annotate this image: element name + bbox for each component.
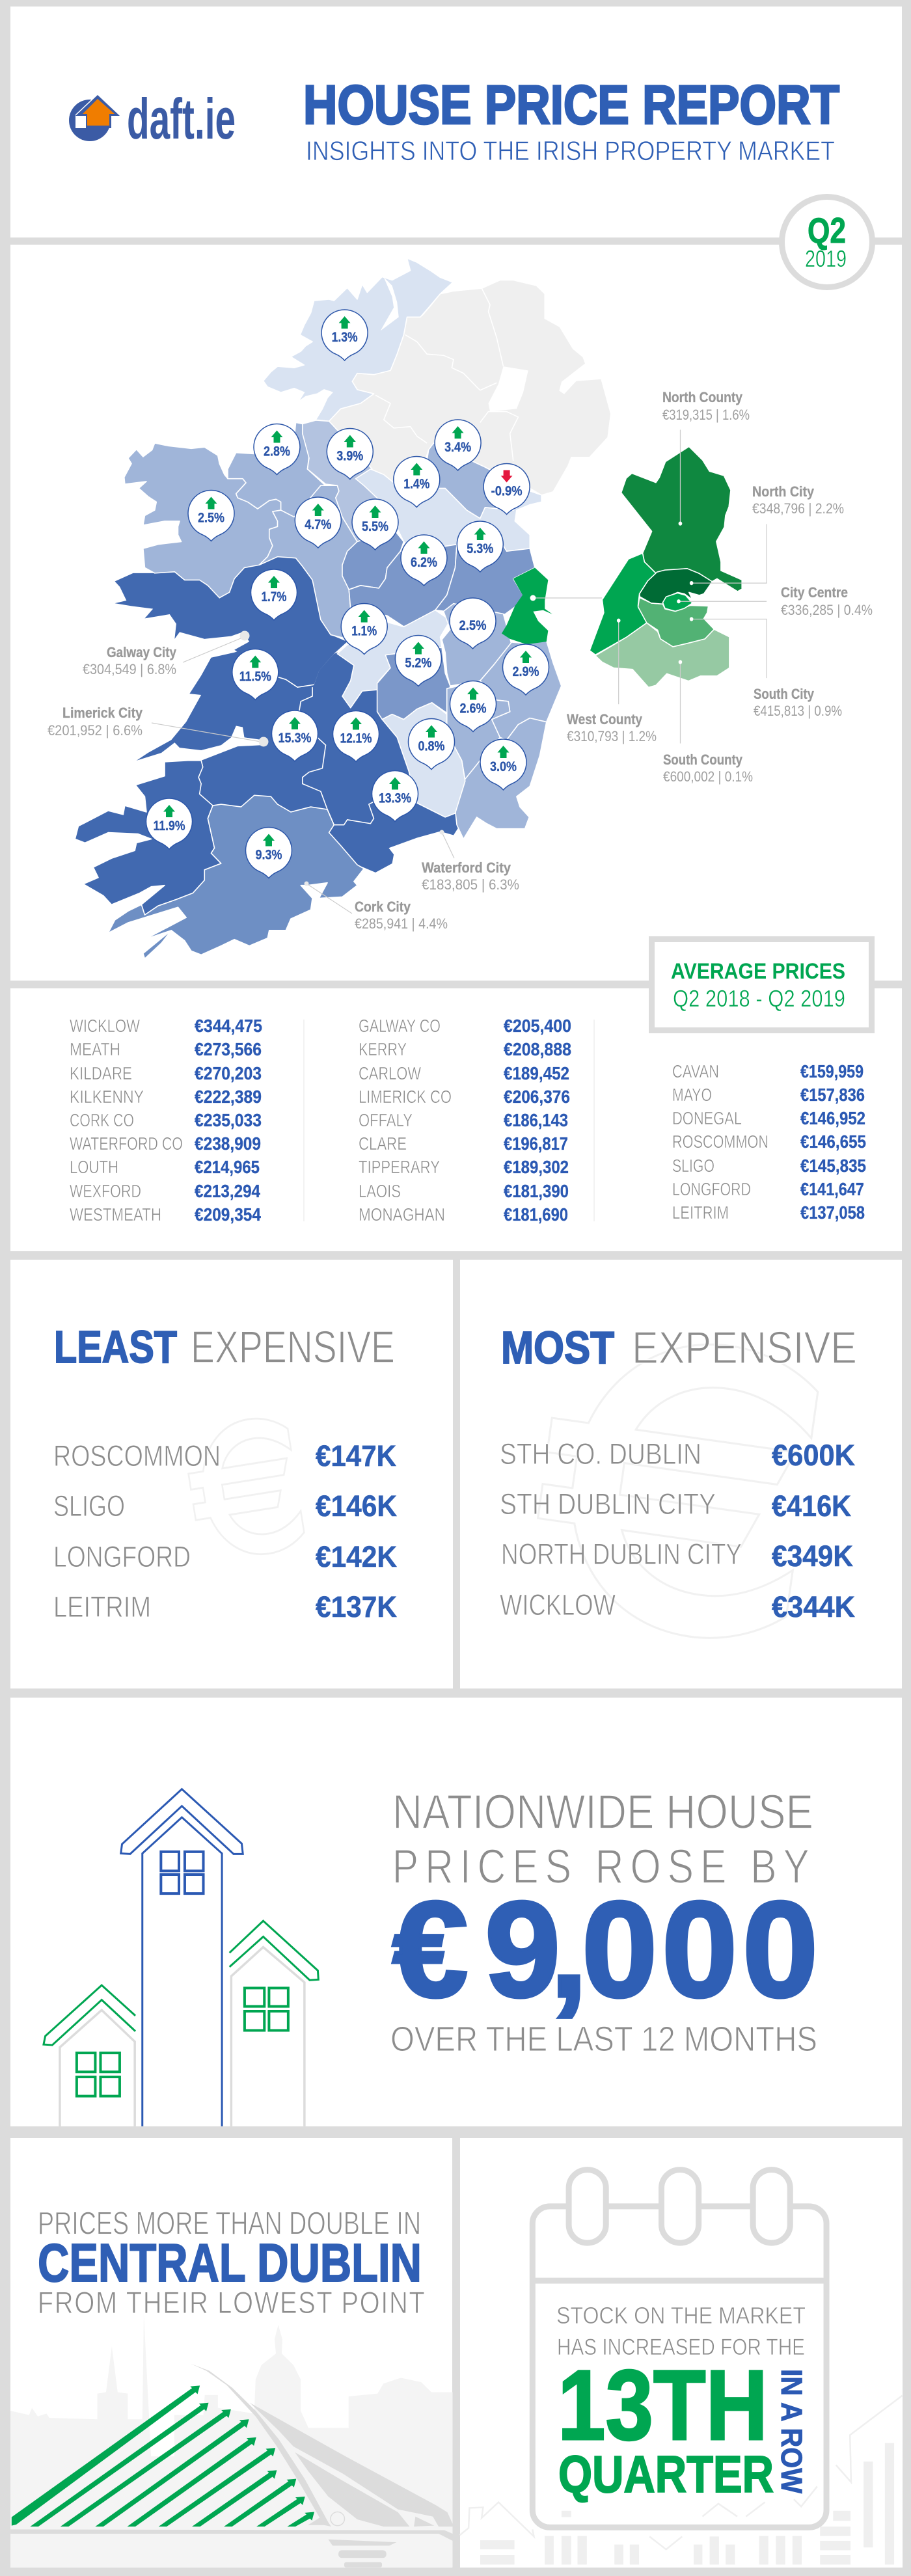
label: Limerick City [48, 705, 268, 747]
label: West County [567, 711, 657, 744]
badge: Q2 2019: 2019 [805, 245, 847, 272]
Cork [108, 795, 364, 958]
pin: 3.9% [327, 428, 373, 479]
pin: -0.9% [483, 463, 530, 514]
label: Galway City: €304,549 | 6.8% [83, 661, 176, 677]
headline: nationwide: NATIONWIDE HOUSE [392, 1785, 813, 1839]
column 1 prices: KILDARE [70, 1063, 132, 1083]
rising arrows [12, 2385, 314, 2527]
list: most expensive: STH DUBLIN CITY [500, 1487, 716, 1521]
column 2 prices: €208,888 [504, 1039, 571, 1059]
column 1 prices: €213,294 [195, 1181, 261, 1201]
column 2 prices: €181,390 [504, 1181, 569, 1201]
pin: 5.2%: 5.2% [405, 656, 432, 670]
badge: Q2 2019 [782, 197, 872, 288]
pin: -0.9%: -0.9% [491, 484, 523, 498]
list: least expensive: €142K [316, 1540, 397, 1573]
column 1 prices [70, 1016, 262, 1225]
Clare, Limerick, Tipperary and Waterford [137, 647, 459, 873]
pin: 2.5% Kildare [450, 598, 496, 649]
pin: 3.4%: 3.4% [444, 440, 471, 455]
column 1 prices: WESTMEATH [70, 1204, 161, 1225]
pin: 2.5% Mayo [188, 490, 234, 541]
list: most expensive: €349K [772, 1539, 853, 1573]
icon: houses [44, 1789, 318, 2126]
Galway [115, 557, 347, 687]
South County [595, 623, 729, 687]
headline: central dublin: CENTRAL DUBLIN [38, 2232, 422, 2293]
column 2 prices: LAOIS [359, 1181, 401, 1201]
Lough Swilly [381, 277, 399, 331]
label: West County: West County [567, 711, 643, 727]
label: Waterford City: Waterford City [422, 860, 511, 876]
logo: daft.ie [69, 87, 236, 151]
pin: 6.2%: 6.2% [411, 555, 437, 570]
headline: stock on the market: HAS INCREASED FOR THE [557, 2335, 805, 2360]
icon: euro watermark [524, 1323, 823, 1649]
label: South City: €415,813 | 0.9% [754, 703, 842, 719]
connector: Dublin to breakout [530, 595, 602, 601]
badge: average prices [652, 940, 872, 1031]
illustration: faint houses and bars [460, 2396, 903, 2564]
skyline [10, 2314, 452, 2568]
headline: stock on the market: QUARTER [558, 2445, 774, 2503]
label: South City: South City [754, 686, 815, 702]
headline: stock on the market: STOCK ON THE MARKET [556, 2302, 806, 2329]
pin: 1.1%: 1.1% [351, 623, 377, 639]
headline: nationwide: OVER THE LAST 12 MONTHS [390, 2020, 817, 2059]
label: City Centre: €336,285 | 0.4% [781, 602, 873, 618]
Dublin breakout map [530, 389, 873, 785]
label: Waterford City: €183,805 | 6.3% [422, 876, 519, 893]
label: Cork City: €285,941 | 4.4% [355, 915, 448, 932]
heading: least expensive [54, 1322, 395, 1372]
pin: 0.8% [409, 718, 454, 769]
pin: 0.8%: 0.8% [418, 739, 445, 753]
list: least expensive: ROSCOMMON [53, 1439, 221, 1472]
pin: 11.9% [146, 798, 193, 849]
column 2 prices: KERRY [359, 1039, 407, 1059]
label: Limerick City: Limerick City [62, 705, 143, 721]
left house [44, 1985, 135, 2126]
pin: 1.4%: 1.4% [403, 476, 430, 492]
South City [638, 597, 714, 647]
column 1 prices: WATERFORD CO [70, 1133, 183, 1154]
Offaly [349, 545, 457, 627]
column 2 prices: GALWAY CO [359, 1016, 441, 1036]
column 1 prices: LOUTH [70, 1157, 118, 1177]
pin: 1.4% [394, 456, 440, 508]
Meath [435, 545, 535, 614]
pin: 1.1% [341, 603, 387, 655]
icon: calendar [532, 2170, 826, 2527]
centre house [121, 1789, 243, 2126]
Northern Ireland borders and Lough Neagh [375, 288, 528, 461]
bridge [10, 2364, 452, 2568]
label: North City: €348,796 | 2.2% [752, 500, 844, 517]
column 1 prices: CORK CO [70, 1110, 134, 1130]
column 2 prices: CARLOW [359, 1063, 421, 1083]
headline: central dublin: FROM THEIR LOWEST POINT [38, 2286, 425, 2320]
column 3 prices: €141,647 [800, 1179, 864, 1199]
list: most expensive [500, 1437, 855, 1623]
West County [590, 553, 657, 655]
Northern Ireland [329, 280, 611, 495]
list: most expensive: €344K [772, 1590, 855, 1623]
headline: nationwide: PRICES ROSE BY [392, 1840, 809, 1893]
column 2 prices [359, 1016, 571, 1225]
icon: euro watermark [182, 1413, 306, 1564]
label: City Centre: City Centre [781, 584, 848, 601]
pin: 3.4% [435, 420, 481, 470]
Kilkenny east [447, 681, 510, 780]
label: North City: North City [752, 483, 815, 500]
pin: 11.5% [232, 649, 279, 700]
pin: 15.3%: 15.3% [279, 731, 312, 746]
Kilkenny [382, 703, 465, 817]
column 1 prices: €344,475 [195, 1016, 262, 1036]
badge: average prices: Q2 2018 - Q2 2019 [673, 985, 845, 1012]
column 1 prices: WICKLOW [70, 1016, 140, 1036]
North County [621, 446, 742, 591]
heading: least expensive: EXPENSIVE [191, 1322, 395, 1372]
pin: 4.7%: 4.7% [305, 517, 332, 532]
list: least expensive: €146K [316, 1489, 397, 1523]
list: most expensive: €600K [772, 1439, 855, 1472]
column 3 prices: LONGFORD [672, 1179, 751, 1199]
label: Limerick City: €201,952 | 6.6% [48, 722, 143, 739]
label: South County: South County [663, 752, 743, 768]
Longford and Louth band [355, 469, 541, 551]
label: South County: €600,002 | 0.1% [663, 768, 753, 785]
label: South City [754, 686, 842, 719]
pin: 5.2% [395, 635, 441, 686]
column 2 prices: €189,452 [504, 1063, 569, 1083]
panel: map [10, 245, 902, 981]
pin: 2.8%: 2.8% [264, 444, 290, 459]
panel: most expensive [460, 1260, 902, 1688]
list: least expensive: €147K [316, 1439, 396, 1472]
pin: 2.9%: 2.9% [513, 664, 539, 679]
column 2 prices: €186,143 [504, 1110, 568, 1130]
column 1 prices: €209,354 [195, 1204, 262, 1225]
headline: stock on the market [556, 2302, 808, 2503]
pin: 2.6%: 2.6% [459, 701, 487, 716]
list: least expensive: LEITRIM [53, 1590, 151, 1623]
illustration: Dublin skyline and bridge [10, 2314, 452, 2568]
pin: 11.5%: 11.5% [239, 669, 271, 685]
pin: 11.9%: 11.9% [154, 819, 185, 834]
pin: 5.3%: 5.3% [467, 541, 494, 556]
column 1 prices: MEATH [70, 1039, 120, 1059]
list: least expensive: LONGFORD [53, 1540, 191, 1573]
skyline gap [152, 2425, 174, 2455]
list: least expensive: SLIGO [53, 1489, 125, 1523]
column 3 prices: €146,952 [800, 1108, 865, 1128]
column 3 prices: CAVAN [672, 1061, 719, 1081]
pin: 3.0%: 3.0% [490, 759, 517, 774]
panel: least expensive [10, 1260, 453, 1688]
badge: average prices: AVERAGE PRICES [671, 959, 845, 984]
pin: 1.3% [321, 310, 368, 360]
title: HOUSE PRICE REPORT [303, 74, 839, 135]
right house [230, 1921, 318, 2126]
pin: 13.3% [372, 770, 418, 821]
column 3 prices [672, 1061, 866, 1223]
label: Cork City: Cork City [355, 899, 411, 915]
label: Galway City [83, 631, 250, 677]
panel: header [10, 7, 902, 237]
list: most expensive: €416K [772, 1489, 851, 1523]
column 2 prices: €205,400 [504, 1016, 571, 1036]
pin: 6.2% [401, 535, 447, 586]
Sligo [228, 422, 325, 517]
pin: 12.1%: 12.1% [340, 731, 372, 746]
label: City Centre [781, 584, 873, 618]
label: South County [663, 752, 753, 785]
column 2 prices: TIPPERARY [359, 1157, 440, 1177]
Mayo [124, 443, 281, 598]
pin: 13.3%: 13.3% [379, 791, 411, 806]
headline: nationwide [390, 1785, 818, 2059]
Westmeath [342, 530, 403, 590]
Leitrim [303, 420, 394, 541]
headline: stock on the market: 13TH [558, 2350, 768, 2461]
column 2 prices: €206,376 [504, 1087, 570, 1107]
label: Galway City: Galway City [107, 644, 177, 660]
column 1 prices: €222,389 [195, 1087, 262, 1107]
column 1 prices: KILKENNY [70, 1087, 144, 1107]
column 3 prices: €159,959 [800, 1061, 863, 1081]
headline: stock on the market: IN A ROW [775, 2369, 808, 2493]
column 1 prices: €273,566 [195, 1039, 262, 1059]
leader lines and dots [617, 429, 767, 744]
column 2 prices: CLARE [359, 1133, 407, 1154]
Laois [337, 610, 450, 708]
pin: 1.7% [251, 569, 297, 620]
pin: 3.0% [480, 739, 526, 790]
pin: 2.5% Kildare: 2.5% [459, 618, 487, 633]
Wicklow [480, 641, 562, 740]
Kildare [442, 604, 511, 686]
column 3 prices: €137,058 [800, 1202, 865, 1223]
column 3 prices: LEITRIM [672, 1202, 729, 1223]
North City [640, 569, 713, 604]
pin: 4.7% [295, 497, 341, 548]
panel: stock on the market [460, 2138, 903, 2568]
headline: central dublin: PRICES MORE THAN DOUBLE IN [38, 2206, 421, 2241]
pin: 3.9%: 3.9% [336, 449, 364, 463]
column 2 prices: OFFALY [359, 1110, 413, 1130]
column 3 prices: ROSCOMMON [672, 1132, 768, 1152]
column 1 prices: €235,033 [195, 1110, 262, 1130]
label: North County: North County [662, 389, 743, 405]
column 3 prices: €145,835 [800, 1156, 866, 1176]
heading: most expensive [501, 1322, 857, 1373]
pin: 1.7%: 1.7% [262, 590, 287, 604]
column 2 prices: MONAGHAN [359, 1204, 445, 1225]
Cavan and Monaghan [424, 443, 530, 519]
panel: nationwide house prices [10, 1698, 902, 2126]
column 2 prices: €196,817 [504, 1133, 568, 1154]
heading: most expensive: MOST [501, 1322, 614, 1373]
column 3 prices: MAYO [672, 1085, 712, 1105]
pin: 2.5% Mayo: 2.5% [198, 510, 224, 526]
heading: most expensive: EXPENSIVE [632, 1322, 857, 1373]
label: North County [662, 389, 750, 423]
pin: 5.5%: 5.5% [362, 519, 388, 534]
pin: 15.3% [272, 711, 318, 761]
column 1 prices: WEXFORD [70, 1181, 141, 1201]
Carlow area [377, 647, 450, 720]
list: most expensive: WICKLOW [500, 1588, 616, 1621]
column 1 prices: €270,203 [195, 1063, 262, 1083]
panel: central dublin [10, 2138, 452, 2568]
list: most expensive: NORTH DUBLIN CITY [501, 1538, 742, 1571]
list: least expensive [53, 1439, 397, 1623]
pin: 12.1% [333, 711, 379, 761]
Kerry [75, 761, 221, 915]
label: North County: €319,315 | 1.6% [662, 407, 750, 423]
label: West County: €310,793 | 1.2% [567, 728, 657, 744]
label: Cork City [305, 881, 448, 932]
pin: 5.3% [457, 521, 503, 572]
badge: Q2 2019: Q2 [808, 210, 846, 251]
pin: 1.3%: 1.3% [332, 330, 358, 345]
label: North City [752, 483, 844, 517]
Donegal [264, 258, 453, 421]
column 2 prices: LIMERICK CO [359, 1087, 452, 1107]
City Centre [662, 593, 692, 611]
Wexford [455, 718, 547, 839]
column 2 prices: €181,690 [504, 1204, 568, 1225]
logo: daft.ie: daft.ie [127, 87, 236, 151]
column 3 prices: SLIGO [672, 1156, 714, 1176]
heading: least expensive: LEAST [54, 1322, 177, 1372]
pin: 5.5% [352, 499, 398, 550]
pin: 2.8% [254, 424, 300, 475]
Roscommon [259, 485, 357, 639]
column 3 prices: DONEGAL [672, 1108, 742, 1128]
pin: 9.3%: 9.3% [255, 847, 282, 863]
column 2 prices: €189,302 [504, 1157, 569, 1177]
Dublin [502, 567, 552, 644]
pin: 2.6% [450, 681, 496, 731]
map of Ireland by county [75, 258, 611, 958]
column 3 prices: €157,836 [800, 1085, 865, 1105]
pin: 2.9% [502, 644, 549, 695]
headline: central dublin [38, 2206, 425, 2320]
dark county borders [278, 677, 374, 825]
subtitle: INSIGHTS INTO THE IRISH PROPERTY MARKET [306, 135, 835, 166]
list: least expensive: €137K [316, 1590, 397, 1623]
headline: nationwide: €9,000 [392, 1874, 818, 2026]
column 1 prices: €214,965 [195, 1157, 260, 1177]
label: Waterford City [422, 830, 519, 893]
pin: 9.3% [246, 827, 292, 878]
column 3 prices: €146,655 [800, 1132, 866, 1152]
column 1 prices: €238,909 [195, 1133, 261, 1154]
panel: county price table [10, 988, 902, 1251]
list: most expensive: STH CO. DUBLIN [500, 1437, 701, 1471]
